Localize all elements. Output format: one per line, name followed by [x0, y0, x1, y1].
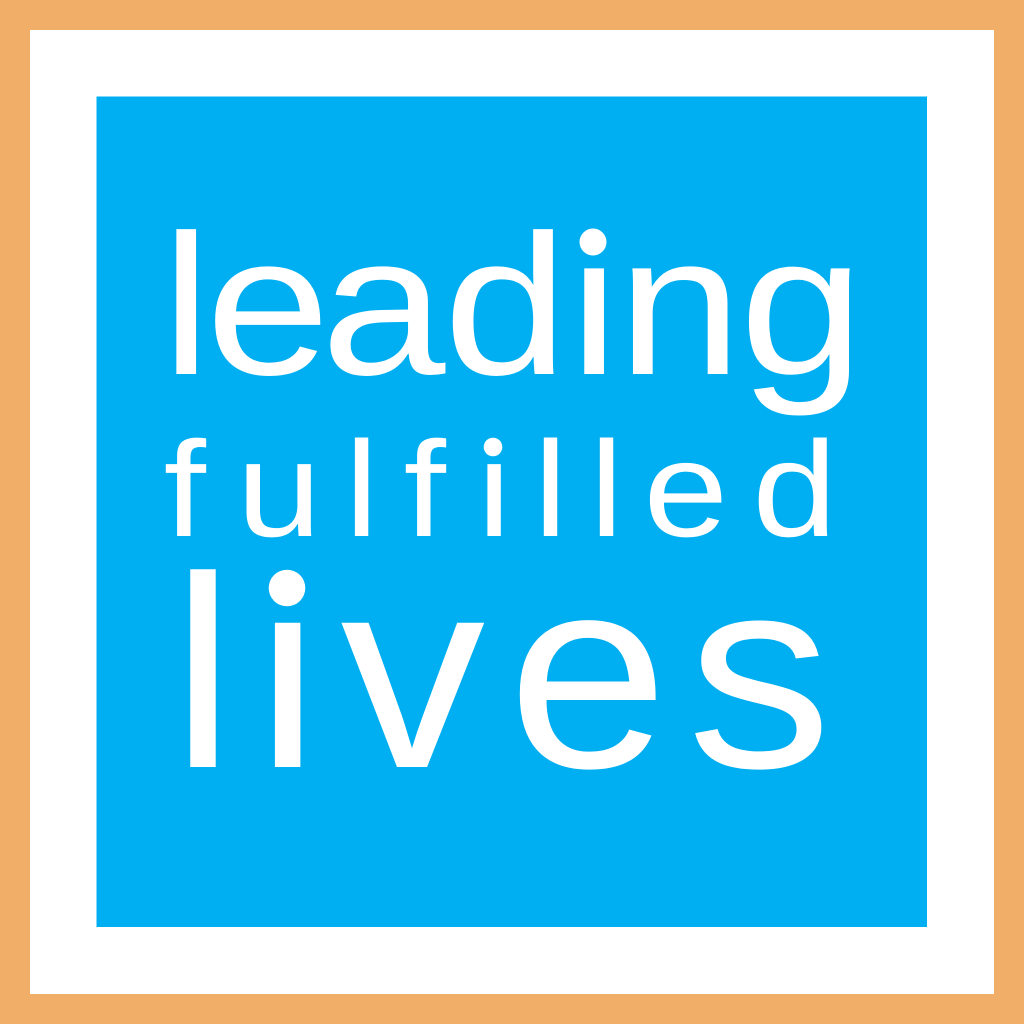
blue panel — [96, 96, 927, 927]
heading: leading: leading — [161, 193, 864, 416]
heading: fulfilled: fulfilled — [164, 413, 837, 565]
round dot of the i in lives — [269, 570, 305, 606]
round dot of the i in fulfilled — [484, 438, 502, 456]
round dot of the i in leading — [580, 228, 606, 256]
heading: lives: lives — [171, 520, 832, 825]
